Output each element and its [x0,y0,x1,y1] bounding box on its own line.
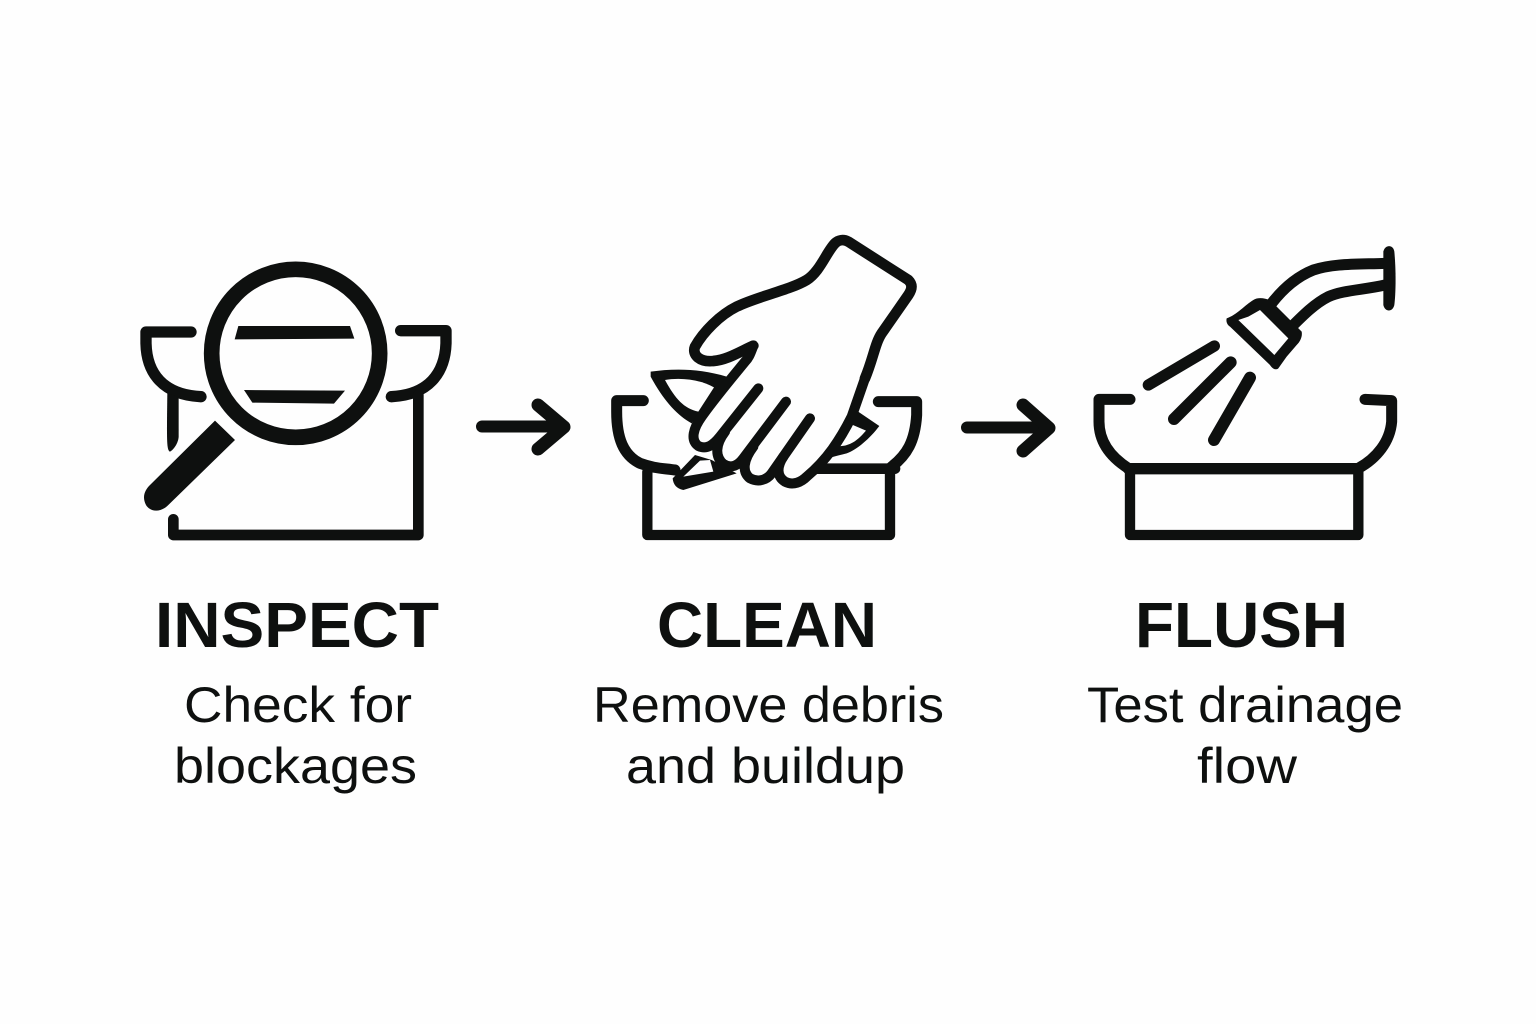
panel: flush [1087,246,1403,794]
icon: hose flushing gutter [1099,246,1396,535]
icon: gutter under magnifying glass [144,269,446,535]
heading: clean: CLEAN [657,589,877,661]
text: inspect description: blockages [174,738,417,794]
text: inspect description: Check for [184,677,412,733]
icon: hand cleaning gutter [617,240,917,535]
text: flush description: Test drainage [1087,677,1403,733]
text: flush description [1087,677,1403,794]
heading: flush: FLUSH [1135,589,1348,661]
panel: inspect [144,269,446,794]
text: clean description: Remove debris [593,677,944,733]
text: clean description: and buildup [626,738,905,794]
arrow: clean to flush [967,405,1049,451]
text: inspect description [174,677,417,794]
text: clean description [593,677,944,794]
text: flush description: flow [1197,738,1298,794]
panel: clean [593,240,944,794]
heading: inspect: INSPECT [155,589,439,661]
arrow: inspect to clean [482,405,564,449]
